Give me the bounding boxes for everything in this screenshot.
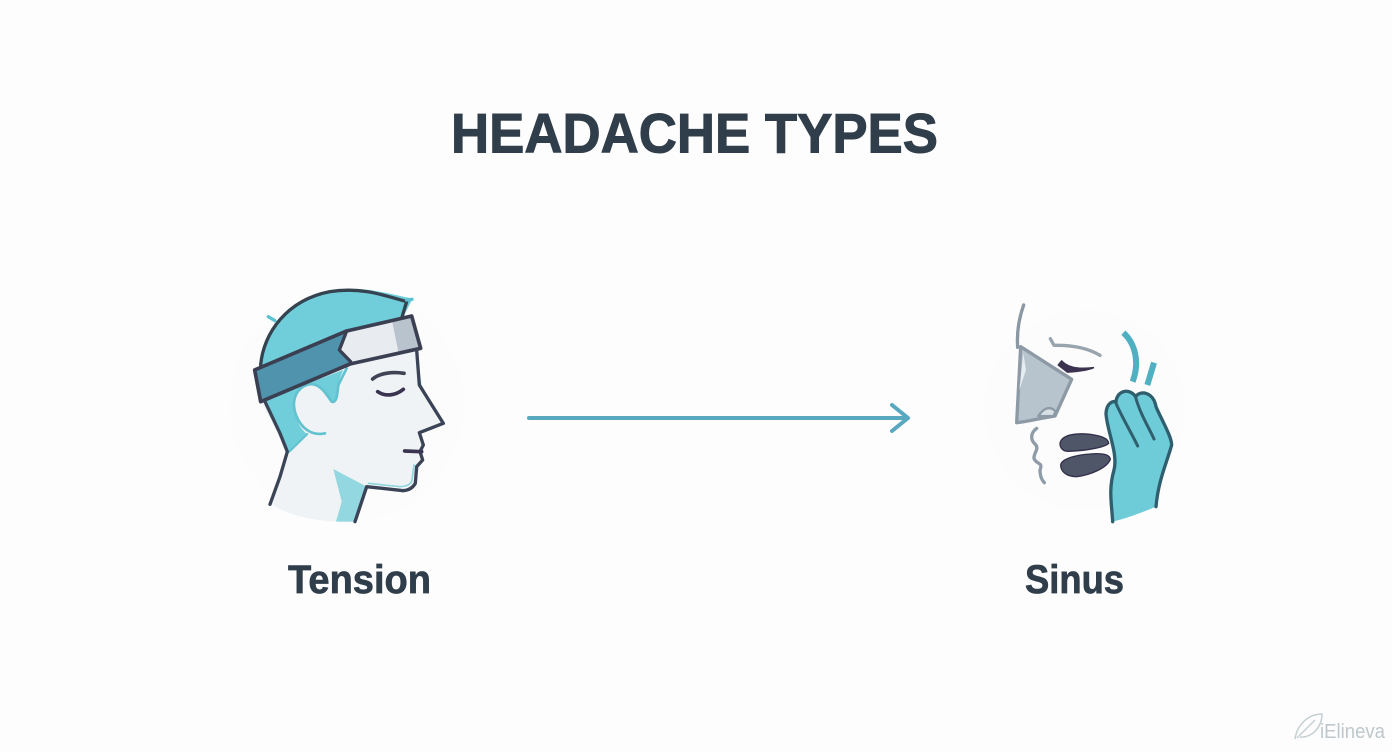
closed eye xyxy=(373,373,404,379)
finger lines xyxy=(1116,403,1138,446)
label: tension: Tension xyxy=(288,558,431,602)
mouth squiggle xyxy=(1032,428,1044,483)
hair fill xyxy=(260,289,413,367)
ear outline xyxy=(294,368,347,434)
title: HEADACHE TYPES xyxy=(451,102,938,164)
headband light section xyxy=(339,317,420,363)
back of neck xyxy=(265,402,287,504)
arrow xyxy=(529,405,908,431)
icon: sinus headache face with hand xyxy=(985,305,1185,522)
jaw highlight xyxy=(368,355,438,487)
headband dark section xyxy=(255,332,351,401)
closed eye xyxy=(1058,361,1093,372)
hand xyxy=(1106,391,1172,522)
forehead line xyxy=(1017,305,1024,347)
lower lip xyxy=(1061,454,1110,477)
upper lip xyxy=(1060,434,1109,451)
neck shadow xyxy=(333,469,367,522)
outlines xyxy=(261,290,407,365)
icon: tension headache head with headband xyxy=(230,288,463,522)
label: sinus: Sinus xyxy=(1025,558,1124,602)
face profile xyxy=(355,350,443,522)
icon: leaf xyxy=(1295,714,1322,739)
face and neck fill xyxy=(262,350,443,522)
watermark text: iElineva xyxy=(1320,721,1386,743)
pain marks xyxy=(1123,333,1136,382)
nose shape xyxy=(1017,347,1072,423)
eyebrow xyxy=(1050,339,1100,355)
watermark logo xyxy=(1295,714,1386,743)
